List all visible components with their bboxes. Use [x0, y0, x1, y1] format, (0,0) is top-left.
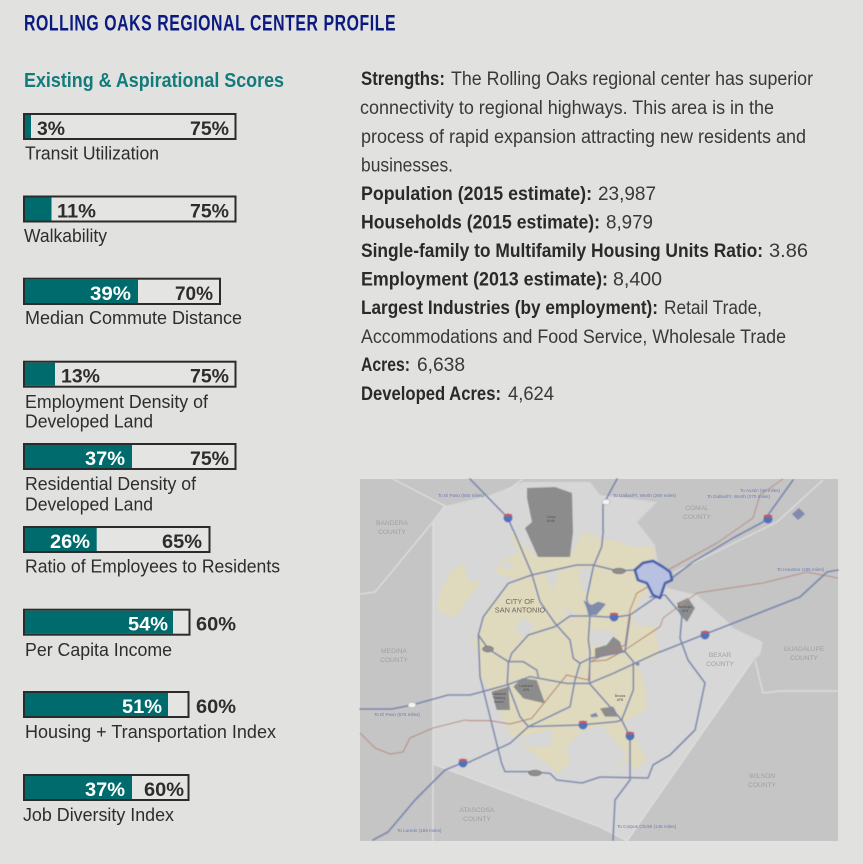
bar: median commute distance: Median Commute Distance — [25, 307, 242, 328]
stat: developed acres: 4,624 — [508, 384, 554, 405]
stat: employment: 8,400 — [613, 270, 662, 291]
distance labels — [374, 488, 825, 833]
strengths paragraph: Strengths: — [361, 69, 445, 90]
bar: per capita income: 60% — [196, 614, 236, 636]
bar: transit utilization: 75% — [190, 118, 229, 140]
city label: CITY OF — [505, 597, 535, 606]
bar: median commute distance: 70% — [175, 283, 213, 305]
bar: walkability: 11% — [57, 200, 96, 222]
Rolling Oaks regional center highlight — [635, 561, 672, 598]
bar: residential density of developed land: 37% — [85, 448, 125, 470]
distance labels: To El Paso (575 miles) — [374, 712, 420, 717]
distance labels: To Corpus Christi (145 miles) — [617, 824, 677, 829]
stat: housing units ratio: 3.86 — [769, 241, 808, 262]
strengths paragraph — [360, 69, 814, 176]
Bexar county area — [433, 482, 763, 841]
facility labels: Brooks — [615, 694, 626, 698]
facility labels: Randolph — [678, 605, 692, 609]
bar: residential density of developed land: Residential Density of — [25, 473, 197, 494]
county labels: BEXAR — [709, 652, 731, 659]
facility labels — [492, 515, 692, 704]
strengths paragraph: businesses. — [361, 156, 453, 176]
strengths paragraph: connectivity to regional highways. This area is in the — [360, 98, 774, 119]
bar: ratio of employees to residents: 26% — [50, 531, 90, 553]
bar: housing and transportation index: Housing + Transportation Index — [25, 721, 277, 742]
heading: existing and aspirational scores: Existing & Aspirational Scores — [24, 70, 284, 92]
stat: households: 8,979 — [606, 212, 653, 234]
distance labels: To Dallas/Ft. Worth (270 miles) — [707, 494, 770, 499]
bar: residential density of developed land: Developed Land — [25, 494, 153, 515]
bar: employment density of developed land: Employment Density of — [25, 391, 209, 412]
stat: largest industries: Accommodations and Food Service, Wholesale Trade — [361, 327, 786, 348]
military and facility areas — [492, 487, 695, 717]
stat: developed acres: Developed Acres: — [361, 384, 501, 405]
bar: walkability: Walkability — [24, 225, 108, 246]
highway shields — [408, 499, 772, 776]
facility labels: Camp — [546, 515, 556, 519]
bar: job diversity index: 37% — [85, 779, 125, 801]
strengths paragraph: process of rapid expansion attracting new residents and — [361, 127, 806, 148]
facility labels: Lackland — [492, 692, 506, 696]
county labels: COUNTY — [790, 655, 819, 662]
bar: job diversity index: Job Diversity Index — [23, 804, 175, 825]
facility labels: AFB — [617, 698, 624, 702]
bar: walkability — [24, 196, 236, 246]
stat: largest industries: Largest Industries (by employment): — [361, 298, 658, 319]
stat: households: Households (2015 estimate): — [361, 212, 600, 234]
city label: SAN ANTONIO — [495, 606, 545, 614]
bar: median commute distance: 39% — [90, 283, 131, 305]
rail lines — [360, 479, 838, 754]
highways — [360, 479, 838, 840]
county labels: COUNTY — [380, 657, 409, 664]
bar: housing and transportation index — [24, 692, 277, 742]
county labels: COUNTY — [463, 816, 492, 823]
map: San Antonio region — [360, 479, 838, 841]
bar: ratio of employees to residents — [24, 527, 280, 577]
facility labels: Training — [493, 696, 505, 700]
county labels: COUNTY — [748, 782, 777, 789]
bar: transit utilization — [24, 114, 236, 164]
distance labels: To El Paso (550 miles) — [438, 493, 484, 498]
bar: residential density of developed land: 75% — [190, 448, 229, 470]
bar: walkability: 75% — [190, 200, 229, 222]
stat: acres: 6,638 — [417, 355, 465, 376]
bar: per capita income — [24, 610, 236, 660]
county labels: COUNTY — [378, 529, 407, 536]
facility labels: AFB — [523, 688, 530, 692]
county labels: ATASCOSA — [460, 807, 495, 814]
county labels: WILSON — [749, 773, 775, 780]
county labels: MEDINA — [381, 648, 407, 655]
bar: job diversity index — [23, 775, 188, 825]
bar: transit utilization: Transit Utilization — [25, 142, 159, 164]
strengths paragraph: The Rolling Oaks regional center has superior — [451, 69, 814, 90]
title: ROLLING OAKS REGIONAL CENTER PROFILE — [24, 12, 396, 36]
county labels: GUADALUPE — [784, 646, 825, 653]
stat: population: 23,987 — [598, 184, 656, 205]
bar: median commute distance — [24, 279, 242, 328]
county labels: COMAL — [685, 505, 709, 512]
facility labels: AFB — [682, 609, 689, 613]
bar: per capita income: Per Capita Income — [25, 639, 172, 660]
county labels — [376, 505, 825, 823]
county labels: COUNTY — [706, 661, 735, 668]
stat: largest industries: Retail Trade, — [664, 298, 762, 319]
bar: job diversity index: 60% — [144, 779, 184, 801]
facility labels: Bullis — [547, 519, 555, 523]
text block: strengths and statistics — [360, 69, 814, 405]
blue-grey annexed areas — [583, 508, 805, 717]
bar: housing and transportation index: 60% — [196, 696, 236, 718]
city of San Antonio — [438, 530, 660, 773]
bar: ratio of employees to residents: Ratio of Employees to Residents — [25, 556, 280, 577]
bar: per capita income: 54% — [128, 614, 168, 636]
bar: housing and transportation index: 51% — [122, 696, 162, 718]
bar: employment density of developed land: 75% — [190, 366, 229, 388]
county boundaries — [360, 479, 838, 841]
bar: residential density of developed land — [24, 444, 236, 515]
bar: transit utilization: 3% — [37, 118, 65, 140]
stat: acres — [361, 355, 465, 376]
distance labels: To Austin (80 miles) — [740, 488, 781, 493]
distance labels: To Laredo (155 miles) — [397, 828, 442, 833]
county labels: BANDERA — [376, 520, 409, 527]
facility labels: Annex — [494, 700, 504, 704]
distance labels: To Dallas/Ft. Worth (290 miles) — [613, 493, 676, 498]
county labels: COUNTY — [683, 514, 712, 521]
stat: largest industries — [361, 298, 786, 348]
stat: employment: Employment (2013 estimate): — [361, 270, 608, 291]
bar: employment density of developed land: 13% — [61, 366, 100, 388]
stat: housing units ratio: Single-family to Multifamily Housing Units Ratio: — [361, 241, 763, 262]
stat: acres: Acres: — [361, 355, 410, 376]
facility labels: Lackland — [519, 684, 533, 688]
stat: population: Population (2015 estimate): — [361, 184, 592, 205]
distance labels: To Houston (195 miles) — [777, 567, 825, 572]
city label — [495, 597, 545, 614]
bar: employment density of developed land: Developed Land — [25, 411, 153, 432]
bar: ratio of employees to residents: 65% — [162, 531, 202, 553]
bar: employment density of developed land — [24, 362, 236, 432]
